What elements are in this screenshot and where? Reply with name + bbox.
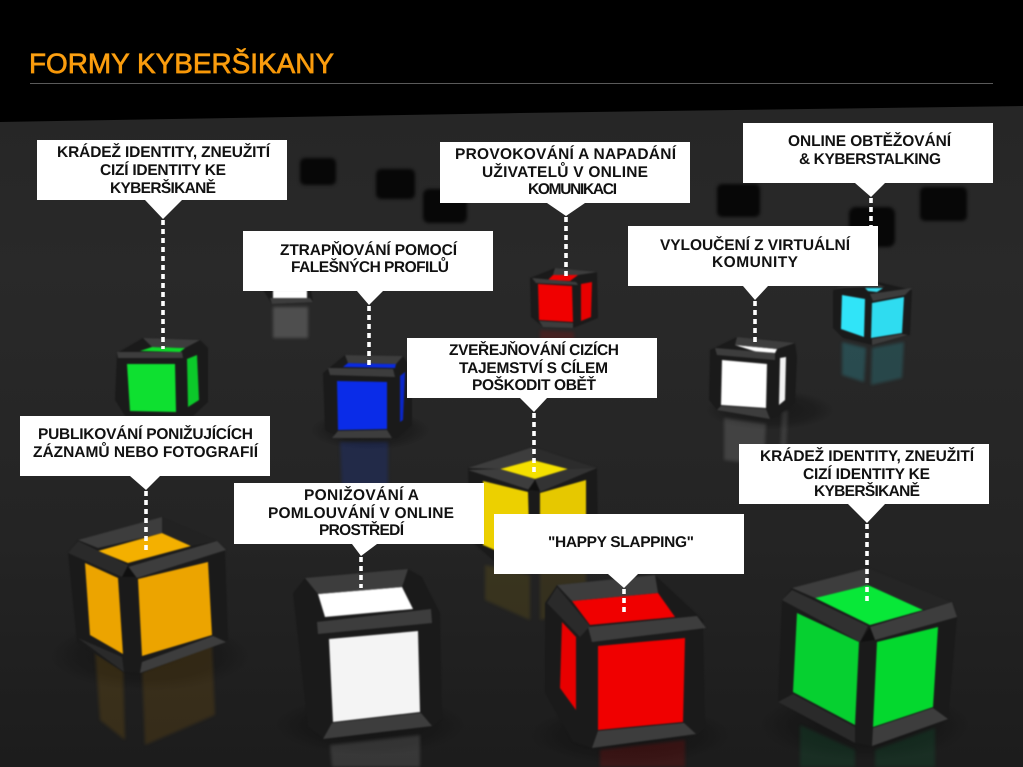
callout: provokování a napadání: PROVOKOVÁNÍ A NAPADÁNÍ [455,145,677,163]
callout: zveřejňování tajemství: ZVEŘEJŇOVÁNÍ CIZÍCH [449,341,619,359]
black header band [0,0,1023,122]
callout: krádež identity (vpravo): KYBERŠIKANĚ [814,482,920,500]
callout: happy slapping [494,514,744,612]
callout: online obtěžování: ONLINE OBTĚŽOVÁNÍ [788,132,952,150]
cube: large white [293,569,442,739]
background black cubes [300,158,967,247]
cube: half hidden white, far back [263,290,313,304]
callout: vyloučení z komunity [628,226,878,345]
cube: small green [115,338,208,416]
callout: online obtěžování [743,123,993,226]
cube: small white [709,337,797,419]
callout: krádež identity (vlevo nahoře): CIZÍ IDENTITY KE [100,161,226,179]
cube: orange [68,517,228,673]
callout: krádež identity (vlevo nahoře): KYBERŠIKANĚ [110,179,216,197]
callout: krádež identity (vpravo) [739,444,989,603]
cube: small red [530,268,598,328]
callout: ponižování a pomlouvání: PROSTŘEDÍ [319,521,405,539]
callout: publikování záznamů [20,416,270,550]
callout: ztrapňování: ZTRAPŇOVÁNÍ POMOCÍ [280,241,458,259]
callout: provokování a napadání: UŽIVATELŮ V ONLINE [482,162,648,181]
callout: krádež identity (vpravo): CIZÍ IDENTITY KE [803,465,930,483]
cube: blue [323,355,412,440]
cube: large red [545,575,706,748]
callout: krádež identity (vlevo nahoře): KRÁDEŽ IDENTITY, ZNEUŽITÍ [57,143,271,161]
callout: online obtěžování: & KYBERSTALKING [799,151,941,168]
callout: zveřejňování tajemství: TAJEMSTVÍ S CÍLEM [459,359,608,377]
cube: large green [778,568,957,746]
cube: yellow [468,447,598,565]
callout: ztrapňování [243,231,493,366]
callout: zveřejňování tajemství: POŠKODIT OBĚŤ [472,376,597,394]
title rule [30,83,993,84]
cube floor shadows [50,390,970,765]
callout: krádež identity (vpravo): KRÁDEŽ IDENTITY, ZNEUŽITÍ [760,447,975,465]
cube reflections [95,307,935,767]
callout: happy slapping: "HAPPY SLAPPING" [548,534,694,551]
callout: ponižování a pomlouvání: PONIŽOVÁNÍ A [304,486,419,504]
callout: provokování a napadání: KOMUNIKACI [528,181,617,198]
cube: cyan [833,282,912,345]
callout: zveřejňování tajemství [407,338,657,474]
callout: vyloučení z komunity: KOMUNITY [712,254,799,271]
callout: publikování záznamů: PUBLIKOVÁNÍ PONIŽUJÍCÍCH [38,425,253,443]
callout: vyloučení z komunity: VYLOUČENÍ Z VIRTUÁLNÍ [660,236,851,254]
title: FORMY KYBERŠIKANY [29,48,334,79]
callout: ponižování a pomlouvání: POMLOUVÁNÍ V ONLINE [268,504,454,522]
callout: krádež identity (vlevo nahoře) [37,140,287,349]
callout: ztrapňování: FALEŠNÝCH PROFILŮ [291,257,449,276]
callout: provokování a napadání [440,142,690,276]
callout: ponižování a pomlouvání [234,483,484,588]
callout: publikování záznamů: ZÁZNAMŮ NEBO FOTOGRAFIÍ [33,442,259,461]
